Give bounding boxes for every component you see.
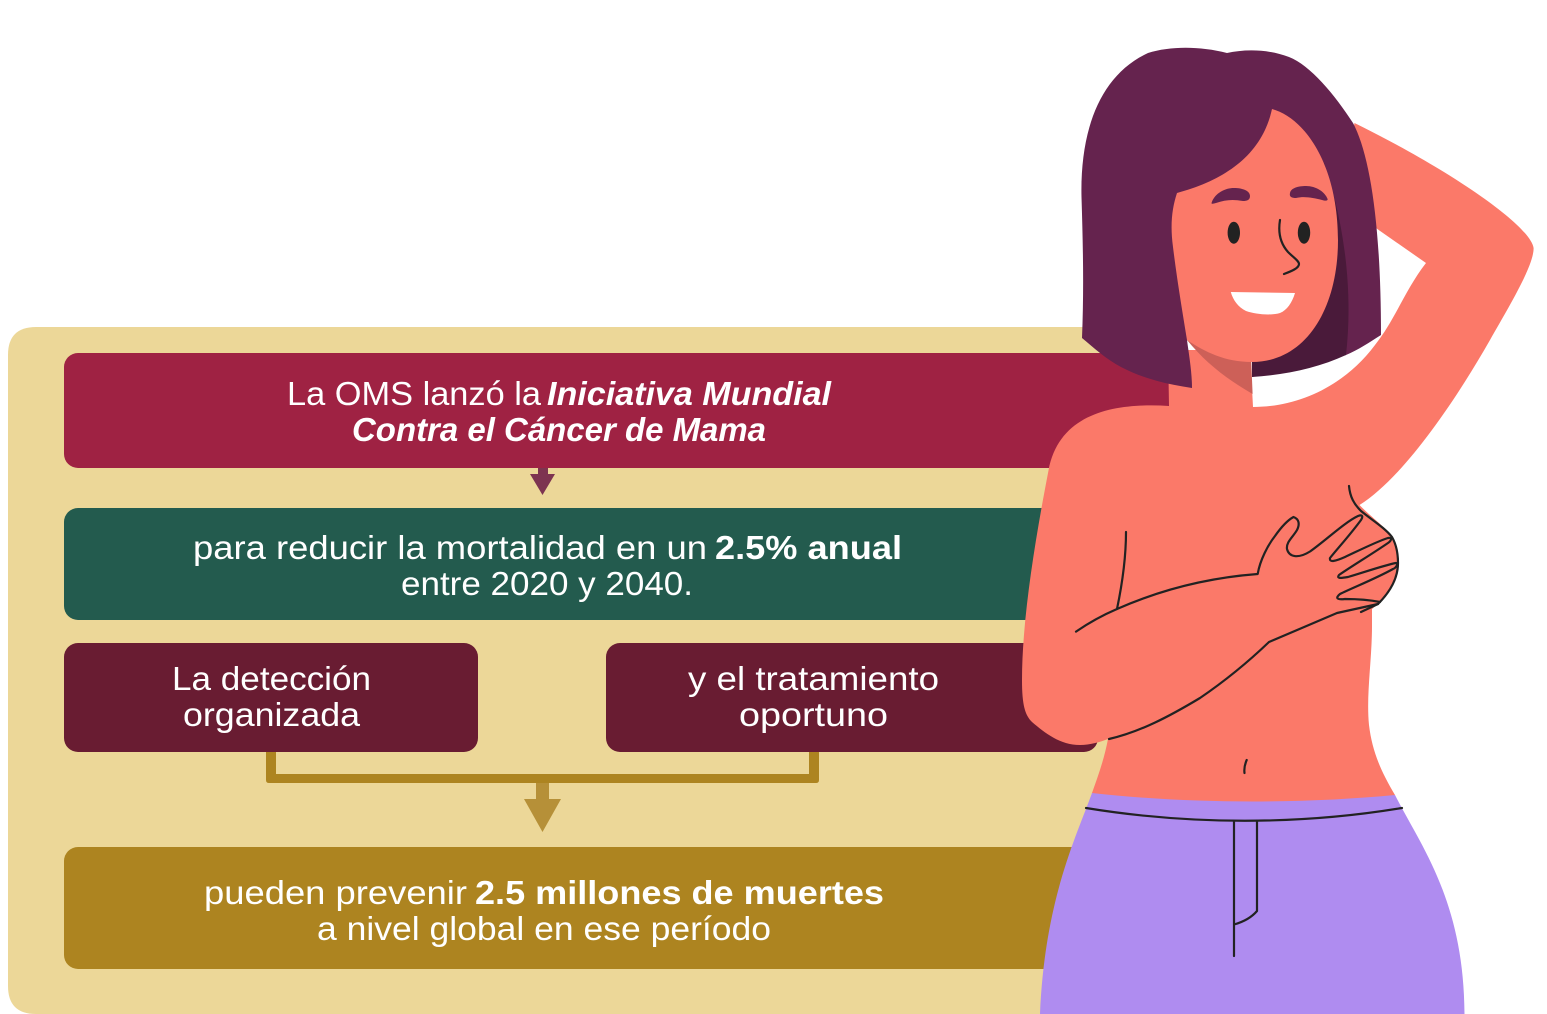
panel: timely treatment [606, 643, 1098, 752]
pants [1040, 793, 1464, 1014]
panel: mortality goal: entre 2020 y 2040. [401, 565, 693, 602]
arm and hand outlines [1076, 486, 1398, 739]
fly lines [1234, 821, 1257, 956]
illustration: woman performing breast self-exam [1022, 48, 1534, 1014]
panel: organized detection [64, 643, 478, 752]
panel: WHO initiative [64, 353, 1174, 468]
waistband line [1086, 808, 1402, 821]
panel: timely treatment: oportuno [739, 696, 888, 733]
connector bracket [266, 752, 819, 783]
panel: WHO initiative: Iniciativa Mundial [547, 375, 832, 412]
panel: mortality goal: para reducir la mortalidad en un [193, 529, 707, 566]
panel: WHO initiative: La OMS lanzó la [287, 375, 542, 412]
panel: deaths prevented: pueden prevenir [204, 874, 467, 911]
arrow: bracket to result [524, 783, 561, 832]
navel [1244, 760, 1247, 773]
face [1172, 109, 1338, 362]
background panel [8, 327, 1130, 1014]
panel: mortality goal: 2.5% anual [715, 529, 902, 566]
shaded hair [1252, 163, 1349, 377]
panel: organized detection: La detección [172, 660, 371, 697]
panel: WHO initiative: Contra el Cáncer de Mama [352, 411, 766, 448]
body and raised arm [1022, 123, 1534, 815]
panel: mortality goal [64, 508, 1104, 620]
hair [1081, 48, 1381, 388]
panel: deaths prevented: 2.5 millones de muertes [475, 874, 884, 911]
neck shadow [1187, 330, 1253, 394]
arrow: initiative to goal [530, 468, 555, 495]
panel: organized detection: organizada [183, 696, 361, 733]
panel: deaths prevented [64, 847, 1124, 969]
eyebrows [1211, 186, 1328, 204]
nose [1279, 220, 1299, 274]
panel: timely treatment: y el tratamiento [688, 660, 939, 697]
panel: deaths prevented: a nivel global en ese período [317, 910, 771, 947]
eyes [1228, 222, 1310, 244]
smile [1231, 292, 1295, 314]
